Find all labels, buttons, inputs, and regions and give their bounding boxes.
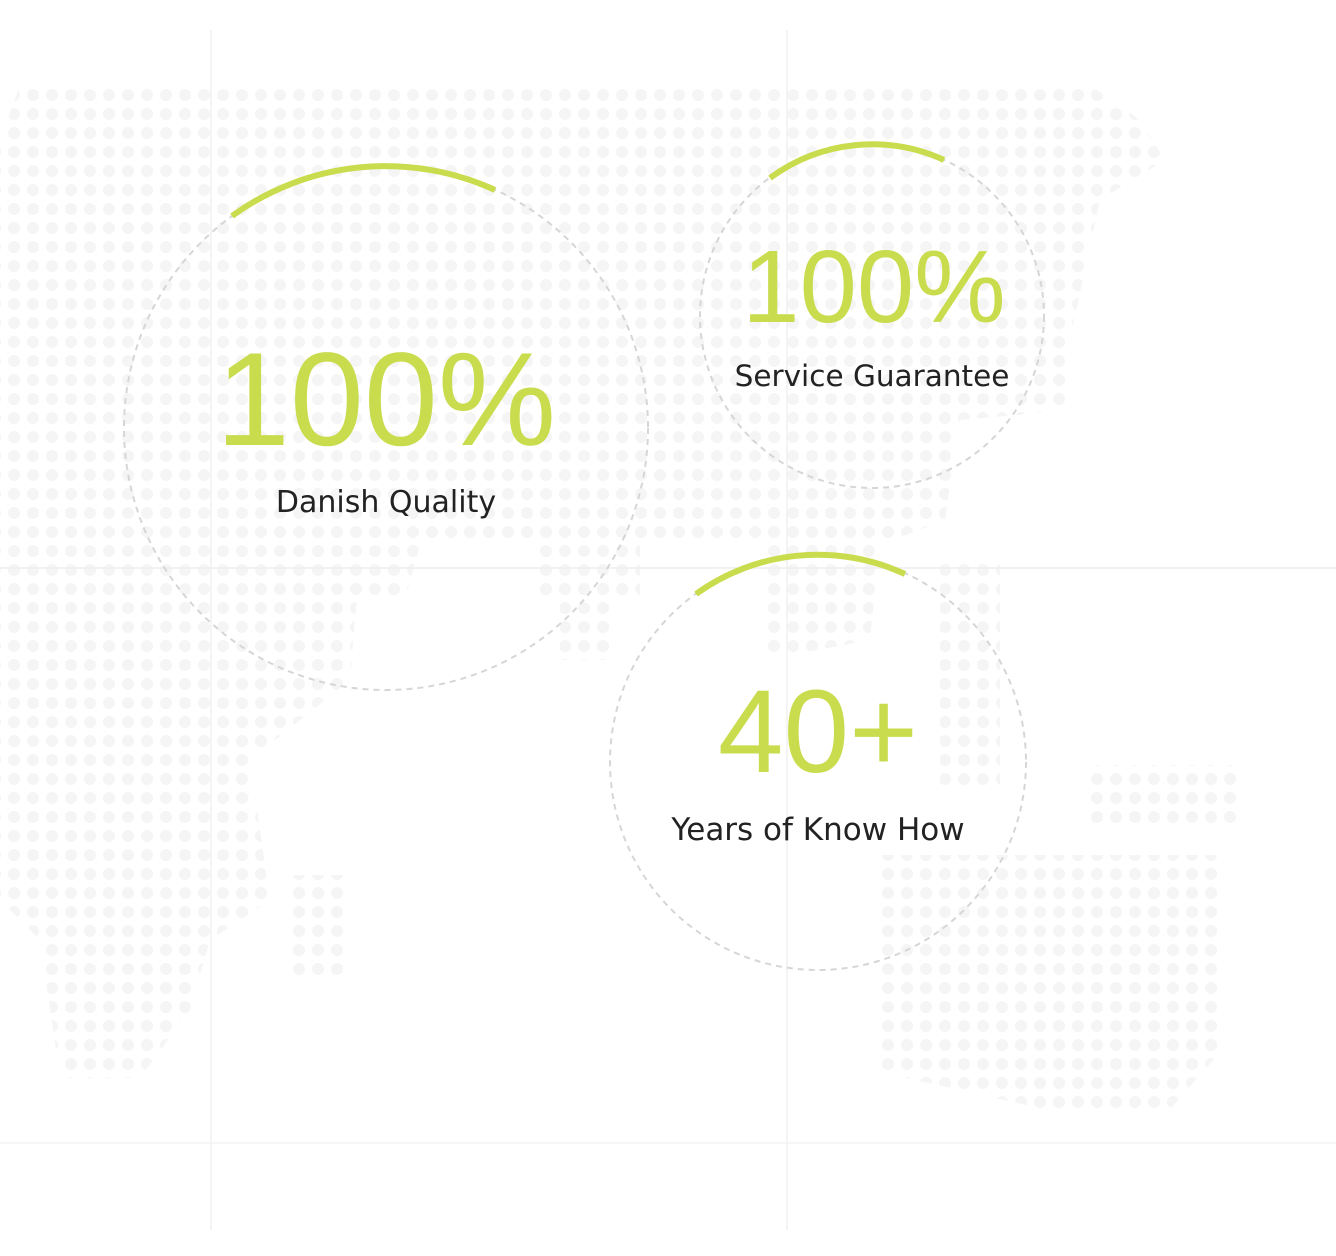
stat: Danish Quality <box>124 166 648 690</box>
stat: Danish Quality: 100% <box>216 326 556 474</box>
stat: Service Guarantee: 100% <box>742 229 1006 344</box>
stat: Years of Know How: 40+ <box>718 666 918 798</box>
stat: Years of Know How <box>610 554 1026 970</box>
stat: Danish Quality: Danish Quality <box>276 485 496 520</box>
stat: Years of Know How: Years of Know How <box>670 812 965 848</box>
stat: Service Guarantee <box>700 144 1044 488</box>
stat: Service Guarantee: Service Guarantee <box>735 359 1009 393</box>
